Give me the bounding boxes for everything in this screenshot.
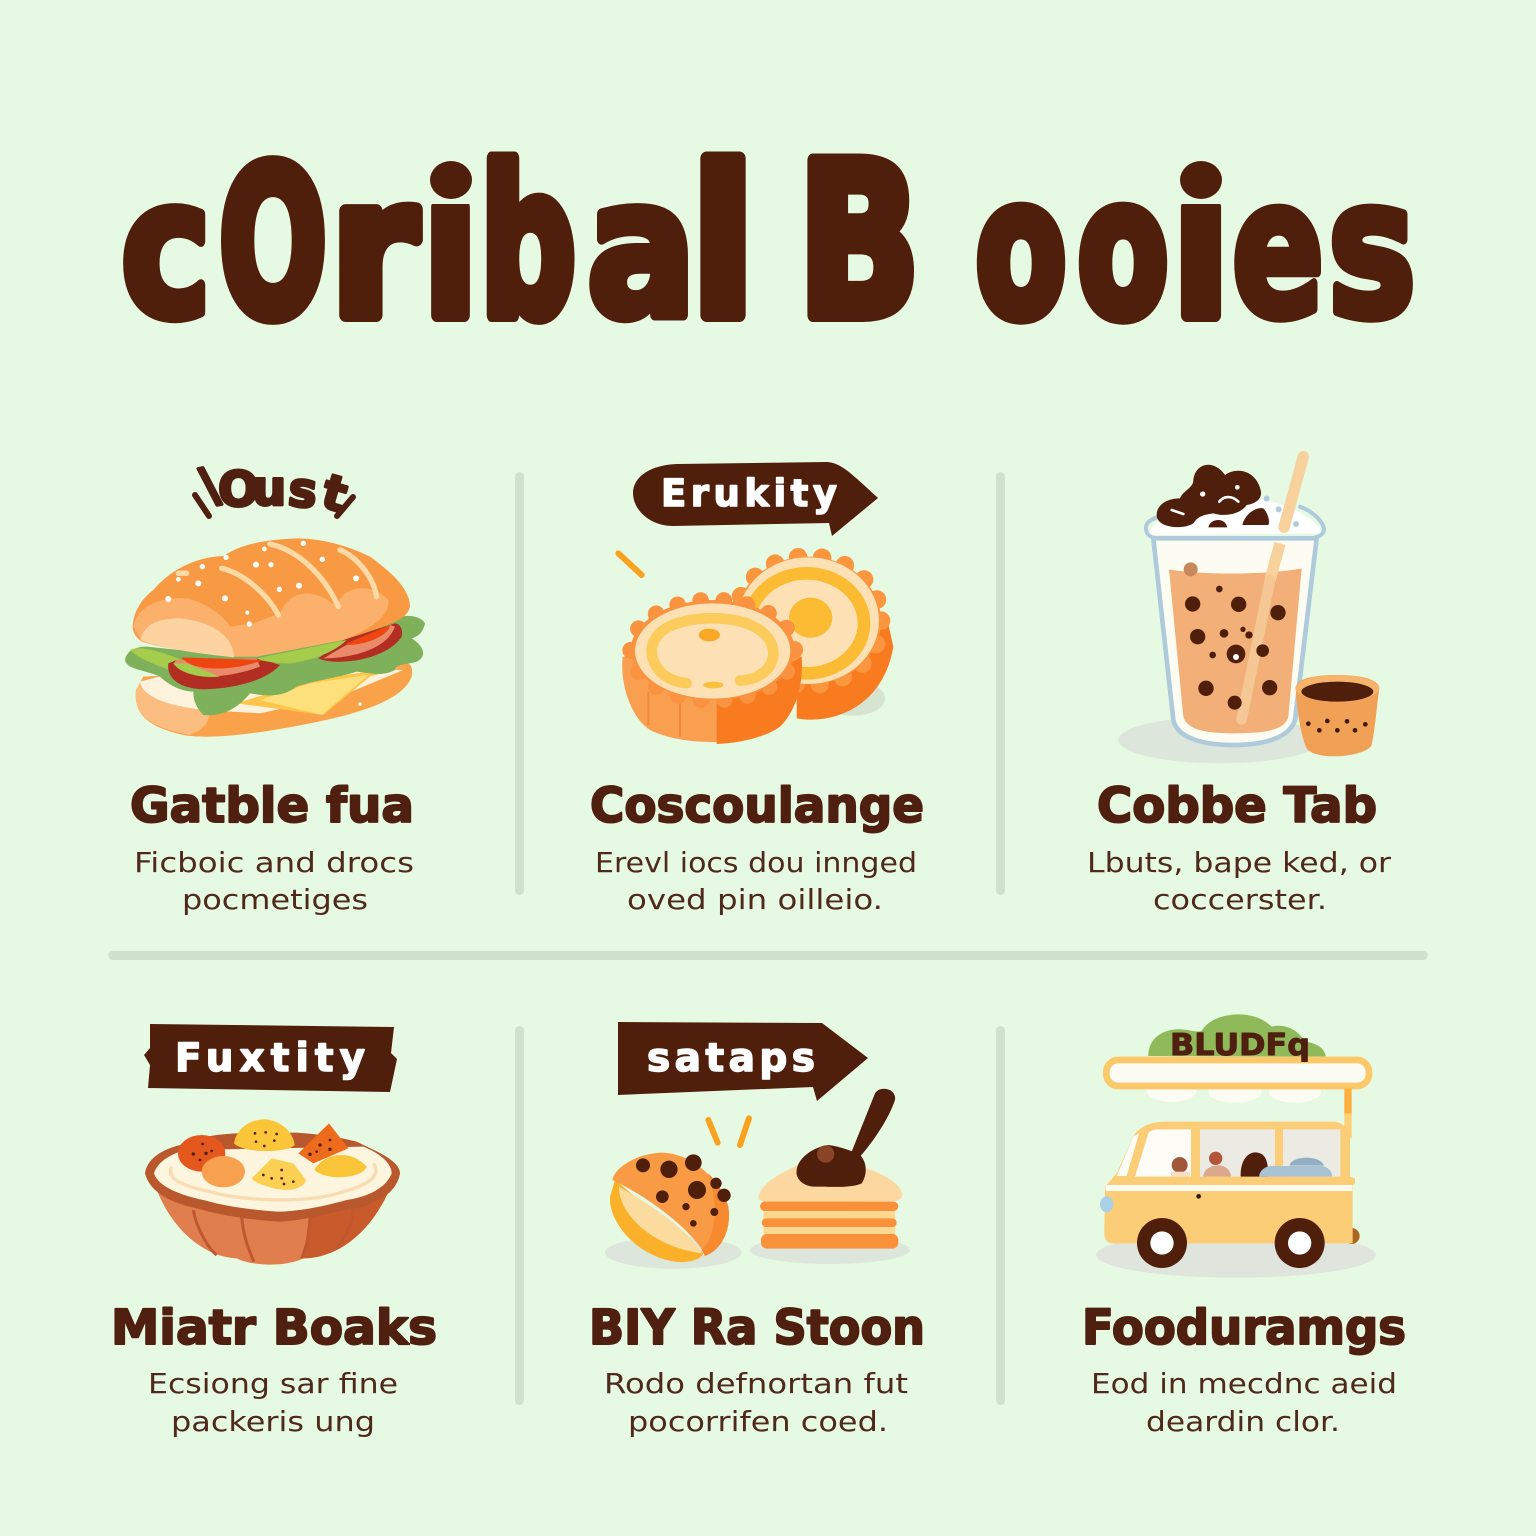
panel: bubble tea — [1087, 457, 1392, 916]
description: Eod in mecdnc aeid — [1091, 1368, 1397, 1400]
description — [148, 1368, 398, 1438]
description: Ecsiong sar fine — [148, 1368, 398, 1400]
description — [604, 1368, 908, 1438]
description: pocorrifen coed. — [628, 1406, 888, 1438]
tag: Erukity — [633, 462, 878, 536]
description — [1091, 1368, 1397, 1438]
tag: Fuxtity — [144, 1024, 397, 1092]
description: Erevl iocs dou innged — [595, 847, 917, 879]
title — [121, 118, 1416, 365]
title: l — [691, 124, 755, 364]
icon: cookie and cake — [605, 1089, 910, 1269]
title: o — [1078, 139, 1168, 360]
description — [134, 847, 414, 916]
description: Rodo defnortan fut — [604, 1368, 908, 1400]
icon: food truck — [1096, 1014, 1376, 1278]
tag: Oust: \Oust — [196, 457, 353, 524]
description: Ficboic and drocs — [134, 847, 414, 879]
title: B — [798, 118, 920, 365]
description: oved pin oilleio. — [627, 884, 883, 916]
panel: tart — [111, 1024, 437, 1438]
description — [1087, 847, 1392, 916]
tag: Sataps: sataps — [647, 1036, 815, 1081]
icon: sandwich — [125, 538, 425, 737]
title: a — [587, 139, 696, 360]
panel: sandwich — [125, 457, 425, 916]
heading: Gatble fua — [130, 778, 414, 834]
title: o — [976, 139, 1066, 360]
tag: Fuxtity: Fuxtity — [175, 1036, 365, 1081]
panel: cookie and cake — [589, 1022, 925, 1438]
title: e — [1232, 139, 1324, 360]
description: coccerster. — [1153, 884, 1327, 916]
title: O — [219, 124, 327, 364]
description: pocmetiges — [182, 884, 368, 916]
tag: Sataps — [618, 1022, 868, 1101]
description: Lbuts, bape ked, or — [1087, 847, 1392, 879]
heading: Miatr Boaks — [111, 1300, 437, 1356]
title: s — [1328, 139, 1416, 360]
icon: mooncakes — [618, 553, 893, 744]
icon: bubble tea — [1118, 457, 1379, 763]
description — [595, 847, 917, 916]
heading: BIY Ra Stoon — [589, 1300, 925, 1356]
description: packeris ung — [171, 1406, 375, 1438]
heading: Fooduramgs — [1082, 1300, 1406, 1356]
description: deardin clor. — [1146, 1406, 1340, 1438]
icon: tart — [145, 1119, 400, 1265]
truck sign text: BLUDFq — [1170, 1028, 1310, 1063]
heading: Coscoulange — [590, 778, 924, 834]
title: i — [1173, 133, 1229, 362]
heading: Cobbe Tab — [1097, 778, 1377, 834]
panel: round pastries — [590, 462, 924, 916]
tag: Erukity: Erukity — [661, 472, 837, 515]
panel: food truck — [1082, 1014, 1406, 1438]
title: b — [480, 124, 576, 364]
title: r — [331, 139, 417, 360]
title: c — [121, 139, 211, 360]
title: i — [424, 133, 478, 362]
